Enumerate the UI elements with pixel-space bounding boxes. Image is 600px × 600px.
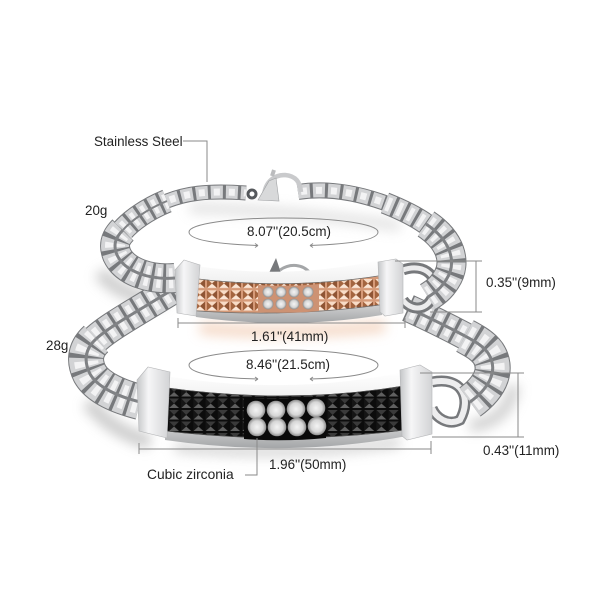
callout: cubic zirconia: Cubic zirconia xyxy=(147,467,234,482)
black studded band xyxy=(163,385,407,438)
left end plate xyxy=(137,367,170,438)
bottom bracelet: 28g black xyxy=(86,288,493,448)
bottom chain right xyxy=(408,308,493,422)
lobster clasp xyxy=(248,170,301,201)
bottom chain left xyxy=(86,288,175,402)
width dimension top xyxy=(178,318,405,344)
label: 20g: 20g xyxy=(85,203,107,218)
width dimension bottom: 1.96''(50mm) xyxy=(269,457,346,472)
rose studded band xyxy=(193,275,382,313)
length loop top xyxy=(189,218,378,248)
width dimension bottom xyxy=(139,441,431,472)
width dimension top: 1.61''(41mm) xyxy=(251,329,328,344)
length loop bottom xyxy=(189,350,378,381)
hook behind bar xyxy=(269,258,310,273)
top chain left xyxy=(115,192,246,278)
silver frame xyxy=(196,260,382,323)
top stones xyxy=(263,287,313,309)
black bar frame xyxy=(165,372,407,448)
top left end plate xyxy=(175,260,200,316)
callout: cubic zirconia xyxy=(147,438,257,482)
callout: stainless steel: Stainless Steel xyxy=(94,134,183,149)
rose zirconia panel xyxy=(258,284,319,313)
height dimension bottom xyxy=(420,373,559,458)
height dimension top xyxy=(395,261,556,312)
right end plate xyxy=(400,365,432,440)
label: 28g: 28g xyxy=(46,338,68,353)
zirconia panel xyxy=(244,396,326,440)
soft shadows xyxy=(88,208,514,451)
infographic canvas xyxy=(46,136,558,479)
height dimension top: 0.35''(9mm) xyxy=(486,275,556,290)
top chain right xyxy=(298,190,452,308)
top right end plate xyxy=(378,259,403,316)
callout: stainless steel xyxy=(94,134,207,182)
height dimension bottom: 0.43''(11mm) xyxy=(483,443,559,458)
length loop bottom: 8.46''(21.5cm) xyxy=(246,357,330,372)
top bracelet: 20g rose gold xyxy=(115,170,452,323)
length loop top: 8.07''(20.5cm) xyxy=(247,224,331,239)
zirconia stones xyxy=(247,399,326,436)
